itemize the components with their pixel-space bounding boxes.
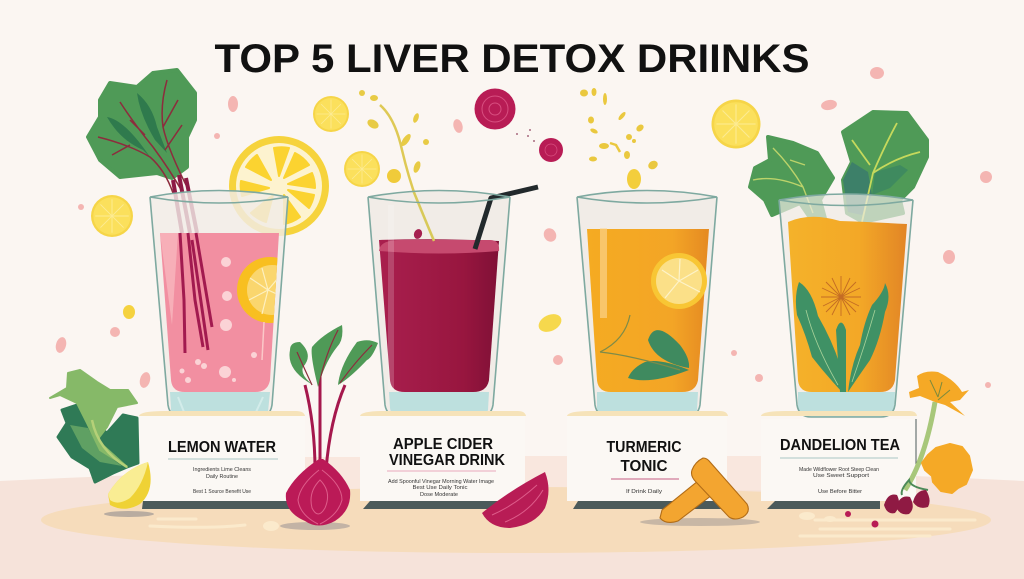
- card 2: apple cider vinegar drink: Best Use Daily Tonic: [412, 485, 468, 491]
- card 3: turmeric tonic: [567, 411, 728, 509]
- beet greens in glass 1: [88, 70, 197, 233]
- table background: [0, 456, 1024, 579]
- kale leaf bottom left: [50, 370, 138, 482]
- dandelion flower plant: [845, 372, 972, 528]
- card 4: dandelion tea: Use Before Bitter: [818, 489, 862, 495]
- card 2: apple cider vinegar drink: [360, 411, 526, 509]
- lemon slice behind glass 1: [229, 136, 329, 236]
- card 4: dandelion tea: [761, 411, 917, 509]
- glass 2: apple cider vinegar drink: [368, 187, 538, 417]
- beet wedge: [482, 472, 548, 528]
- card 3: turmeric tonic: If Drink Daily: [626, 489, 662, 495]
- lemon wedge: [108, 462, 151, 509]
- card 2: apple cider vinegar drink: APPLE CIDER: [393, 436, 493, 453]
- card 1: lemon water: Ingredients Lime Cleans: [193, 467, 251, 473]
- card 1: lemon water: Daily Routine: [206, 474, 238, 480]
- turmeric sticks: [660, 458, 748, 522]
- yellow splash above glass 3: [580, 88, 659, 189]
- card 2: apple cider vinegar drink: Add Spoonful Vinegar Morning Water Image: [388, 479, 494, 485]
- title: TOP 5 LIVER DETOX DRIINKS: [214, 37, 810, 81]
- yellow splash above glass 2: [359, 90, 435, 240]
- card 4: dandelion tea: Made Wildflower Root Steep Clean: [799, 467, 879, 473]
- card 4: dandelion tea: Use Sweet Support: [813, 473, 870, 479]
- glass 3: turmeric tonic: [577, 190, 717, 417]
- glass 4: dandelion tea: [779, 194, 913, 417]
- card 1: lemon water: [139, 411, 305, 509]
- floating lemon slices and droplets: [54, 67, 992, 389]
- card 1: lemon water: Best 1 Source Benefit Use: [193, 489, 251, 495]
- dandelion greens above glass 4: [750, 112, 927, 222]
- card 3: turmeric tonic: TURMERIC: [606, 439, 682, 456]
- card 3: turmeric tonic: TONIC: [620, 458, 668, 475]
- glass 1: lemon water: [149, 190, 289, 411]
- card 2: apple cider vinegar drink: VINEGAR DRINK: [389, 452, 505, 469]
- card 4: dandelion tea: DANDELION TEA: [780, 437, 900, 454]
- card 2: apple cider vinegar drink: Dose Moderate: [420, 492, 458, 498]
- card 1: lemon water: LEMON WATER: [168, 439, 276, 456]
- beetroot plant: [286, 325, 378, 526]
- beet slices flying: [474, 88, 563, 162]
